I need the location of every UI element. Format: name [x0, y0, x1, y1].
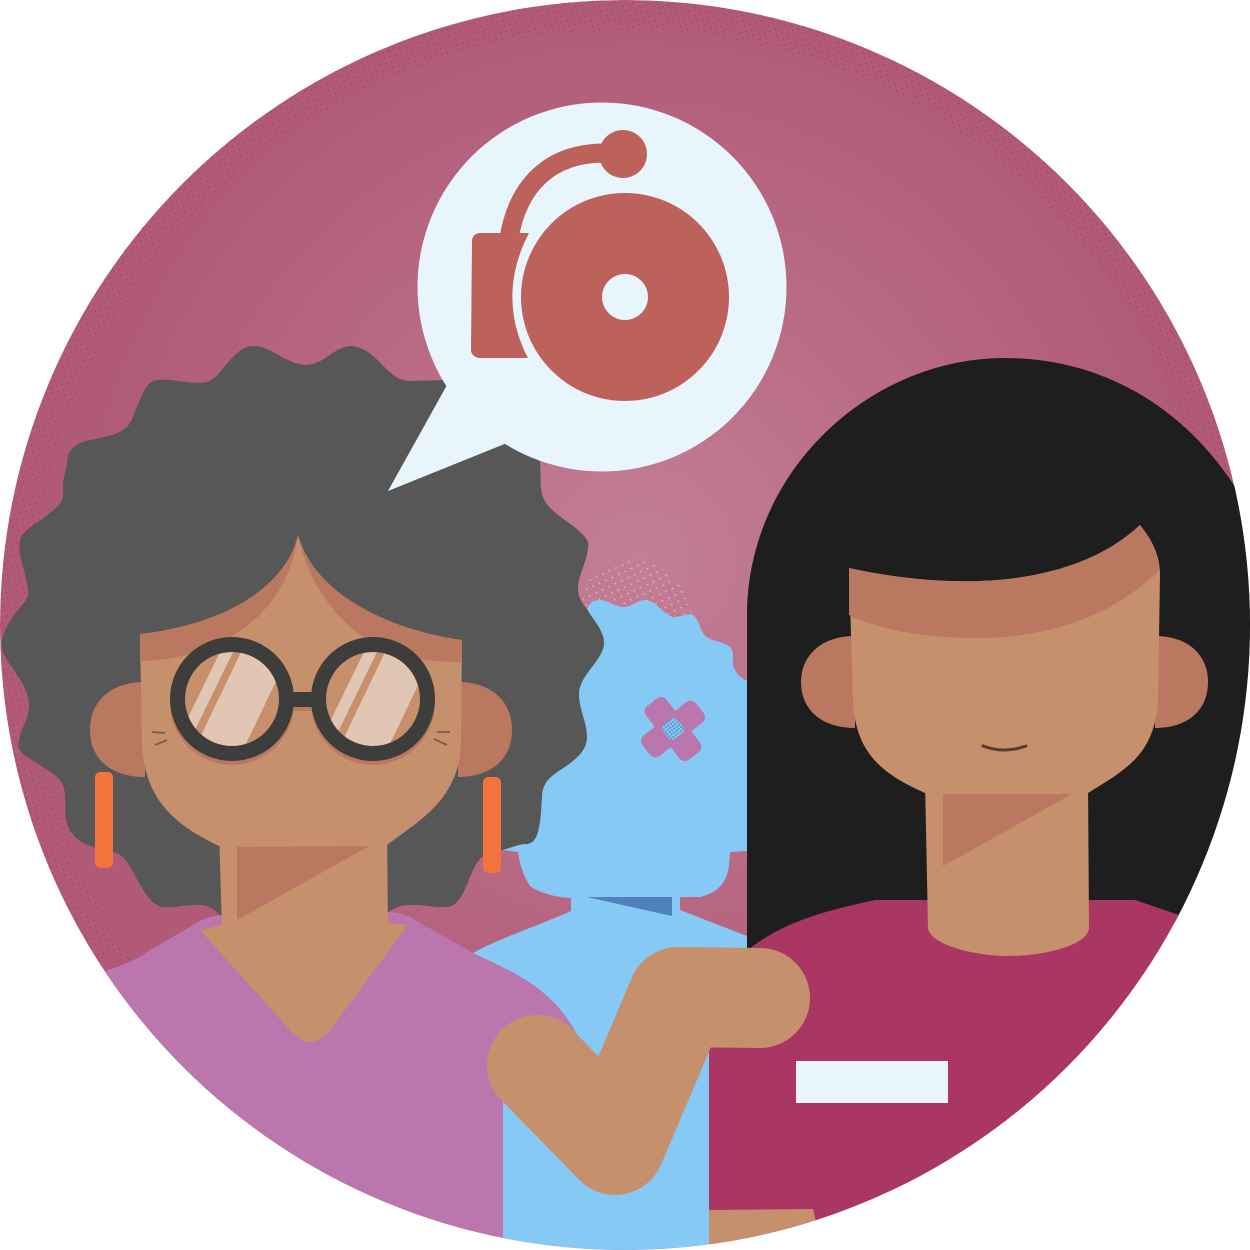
- purple shirt: [106, 912, 578, 1238]
- bandage pad: [662, 718, 684, 740]
- forehead shadow: [849, 525, 1159, 638]
- earring left: [95, 772, 113, 868]
- right lens: [326, 652, 420, 746]
- bandage strip one: [641, 700, 705, 758]
- arm: [537, 997, 760, 1145]
- figure: woman with curly hair and glasses: [2, 346, 604, 1250]
- bell dome: [521, 193, 729, 401]
- halftone dots: [578, 561, 692, 620]
- blue neck shadow: [587, 897, 672, 916]
- bell arm: [509, 153, 605, 238]
- glasses: [170, 640, 435, 765]
- right ear: [1155, 636, 1208, 728]
- figure: person in blue with bandage: [473, 600, 747, 1250]
- speech bubble tail: [388, 340, 560, 491]
- bandage: [641, 697, 705, 761]
- right ear: [458, 682, 512, 777]
- left lens: [185, 652, 279, 746]
- bandage strip two: [644, 697, 702, 761]
- speech bubble with bell: [388, 102, 786, 491]
- left ear: [90, 682, 145, 777]
- blue hair: [502, 600, 747, 898]
- face: [140, 535, 462, 846]
- long black hair: [747, 358, 1250, 1000]
- bell knob: [599, 130, 647, 178]
- face: [849, 525, 1160, 793]
- neck: [925, 780, 1089, 956]
- lower skin: [709, 1209, 816, 1250]
- maroon shirt: [709, 900, 1179, 1244]
- curly grey hair: [2, 346, 604, 915]
- figure: woman with long black hair: [709, 358, 1250, 1250]
- icon: alarm bell: [471, 130, 729, 401]
- crow's feet: [152, 732, 450, 745]
- left ear: [801, 636, 855, 728]
- glasses bridge: [294, 692, 312, 707]
- speech bubble body: [418, 102, 786, 472]
- blue body: [473, 890, 747, 1250]
- forehead shadow: [140, 535, 462, 662]
- neck: [220, 844, 388, 915]
- glasses shadow: [170, 654, 435, 765]
- neck shadow: [237, 846, 369, 920]
- earring right: [483, 777, 501, 873]
- glasses frame: [178, 644, 428, 754]
- bell mount: [471, 233, 529, 358]
- smile: [983, 746, 1026, 750]
- name badge: [796, 1061, 948, 1103]
- neckline: [200, 912, 408, 1042]
- neck shadow: [943, 794, 1072, 866]
